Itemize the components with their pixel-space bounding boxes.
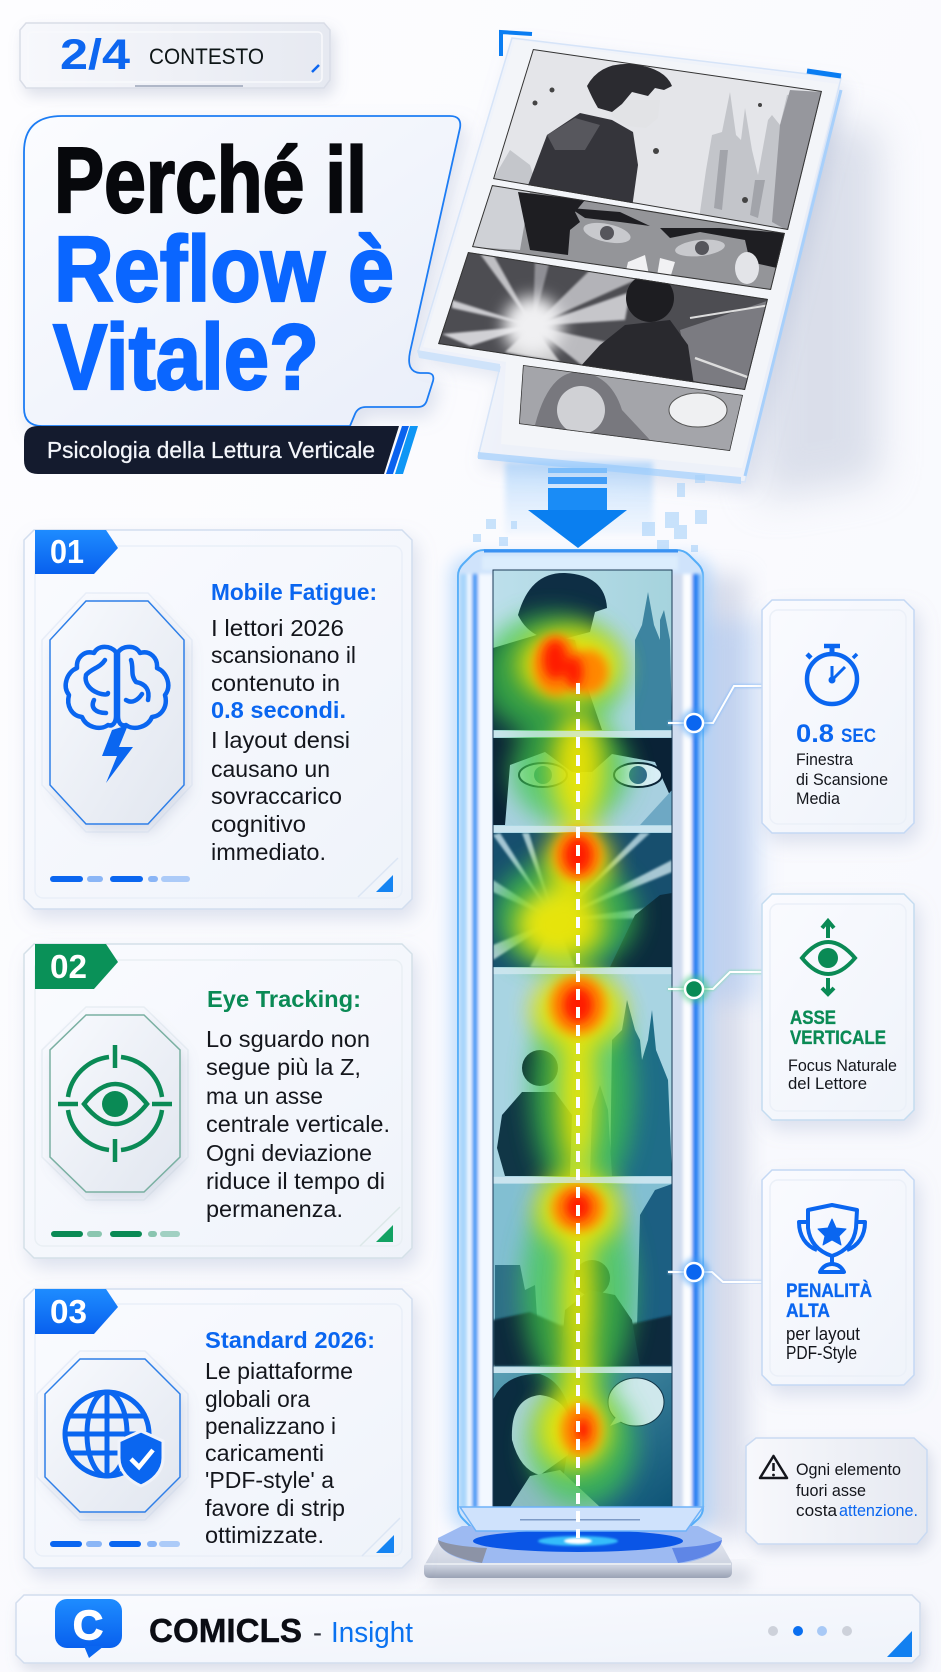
strip panel 1 [493, 570, 672, 730]
heading: standard 2026: Standard 2026: [205, 1327, 375, 1353]
body text card 02 [206, 1026, 390, 1222]
body text card 01: causano un [211, 756, 330, 782]
comic page: original layout [417, 32, 841, 484]
body text card 02: segue più la Z, [206, 1054, 361, 1080]
body text card 03: penalizzano i [205, 1413, 336, 1439]
body text card 01: immediato. [211, 839, 326, 865]
body text card 01: scansionano il [211, 642, 356, 668]
brand suffix: Insight [331, 1617, 413, 1649]
icon: globe with shield [65, 1392, 149, 1476]
stat value: 0.8 [796, 720, 834, 748]
strip panel 3 [493, 833, 672, 967]
stat description [788, 1056, 897, 1093]
strip panel 5 [493, 1184, 672, 1366]
icon: warning triangle [760, 1456, 787, 1478]
panel: title [24, 116, 460, 426]
badge 01 [35, 530, 118, 574]
callout text [796, 1460, 918, 1520]
stat title: PENALITÀ [786, 1280, 872, 1302]
callout: warning note [746, 1438, 927, 1544]
arrow: flow from comic to device [505, 462, 653, 548]
body text card 01: contenuto in [211, 670, 340, 696]
stat description: Media [796, 789, 841, 808]
body text card 03: caricamenti [205, 1440, 324, 1466]
side card: asse verticale [762, 894, 914, 1120]
badge 03 [35, 1289, 118, 1334]
decorative pixels around arrow [473, 475, 707, 552]
stat description: Finestra [796, 750, 853, 769]
body text card 03: globali ora [205, 1386, 310, 1412]
side card: penalità alta [762, 1170, 914, 1385]
tag: 2/4 contesto [20, 23, 330, 88]
comic panel 3: explosion [438, 252, 770, 392]
body text card 03 [205, 1358, 353, 1548]
body text card 03: 'PDF-style' a [205, 1467, 334, 1493]
connector node: green [681, 975, 709, 1003]
panel: card 01 mobile fatigue [24, 530, 412, 909]
stat description [786, 1324, 860, 1363]
body text card 02: ma un asse [206, 1083, 323, 1109]
badge 02 [35, 944, 118, 989]
connector lines to side cards [668, 686, 772, 1282]
body text card 02: permanenza. [206, 1196, 343, 1222]
footer bar [16, 1595, 920, 1663]
icon frame: target eye [42, 1007, 188, 1200]
comic panel 2: eyes close-up [472, 185, 785, 290]
pagination dots [768, 1626, 852, 1636]
body text card 02: riduce il tempo di [206, 1168, 385, 1194]
body text card 01: I lettori 2026 [211, 615, 344, 641]
icon: trophy with star [799, 1205, 865, 1272]
heatmap overlay [480, 613, 637, 1507]
body text card 03: Le piattaforme [205, 1358, 353, 1384]
badge 02: 02 [50, 948, 87, 985]
side card: 0.8 sec [762, 600, 914, 833]
panel: card 03 standard 2026 [24, 1289, 412, 1568]
body text card 01: I layout densi [211, 727, 350, 753]
title line 3: Vitale? [53, 305, 319, 409]
stat description: per layout [786, 1324, 860, 1344]
badge 03: 03 [50, 1293, 87, 1330]
subtitle text: Psicologia della Lettura Verticale [47, 437, 375, 463]
callout text: Ogni elemento [796, 1460, 901, 1479]
logo: chat bubble C [55, 1599, 122, 1658]
body text card 02: centrale verticale. [206, 1111, 390, 1137]
subtitle bar [24, 426, 418, 474]
title line 2: Reflow è [54, 217, 394, 321]
stat description: del Lettore [788, 1074, 867, 1093]
callout text: costa [796, 1501, 838, 1520]
icon frame: globe shield [37, 1351, 188, 1520]
side card: 0.8 sec: SEC [841, 726, 876, 747]
icon: stopwatch [807, 646, 857, 704]
stat description: Focus Naturale [788, 1056, 897, 1075]
stat description: PDF-Style [786, 1343, 857, 1363]
stat description [796, 750, 888, 808]
device base [424, 1507, 732, 1578]
callout text: attenzione. [839, 1501, 918, 1520]
progress bars card 02 [51, 1231, 180, 1237]
body text card 01: cognitivo [211, 811, 306, 837]
side card: penalità alta: ALTA [786, 1301, 830, 1322]
body text card 01 [211, 615, 356, 865]
icon: eye with vertical arrows [802, 921, 855, 994]
body text card 02: Ogni deviazione [206, 1140, 372, 1166]
logo: chat bubble C: C [73, 1602, 103, 1648]
device: vertical strip reader [450, 550, 712, 1532]
heading: mobile fatigue: Mobile Fatigue: [211, 579, 377, 605]
heading: eye tracking: Eye Tracking: [207, 986, 361, 1012]
stat title: ASSE [790, 1008, 836, 1029]
body text card 03: ottimizzate. [205, 1522, 324, 1548]
body text card 03: favore di strip [205, 1495, 345, 1521]
body text card 01: sovraccarico [211, 783, 342, 809]
icon frame: brain [42, 593, 192, 832]
dashed reading axis [576, 683, 580, 1538]
progress bars card 03 [50, 1541, 180, 1547]
title line 1: Perché il [54, 128, 367, 232]
progress bars card 01 [50, 876, 190, 882]
comic brackets [501, 32, 532, 56]
soft shadow behind comic and device [430, 110, 880, 1586]
stat description: di Scansione [796, 770, 888, 789]
comic panel 4: girl and speech bubble [519, 365, 743, 451]
device screen: tinted strip panels [480, 570, 672, 1507]
body text card 01: 0.8 secondi. [211, 697, 346, 723]
icon: brain with lightning [66, 647, 168, 728]
body text card 02: Lo sguardo non [206, 1026, 370, 1052]
comic panel 1: boy and skyline [493, 49, 822, 232]
strip panel 6 [493, 1373, 672, 1507]
callout text: fuori asse [796, 1481, 866, 1500]
tag number: 2/4 [60, 31, 130, 79]
brand name: COMICLS [149, 1612, 302, 1649]
strip panel 2 [493, 738, 672, 825]
connector node: blue top [681, 709, 709, 737]
side card: asse verticale: VERTICALE [790, 1028, 886, 1049]
panel: card 02 eye tracking [24, 944, 412, 1258]
strip panel 4 [497, 1000, 672, 1176]
badge 01: 01 [50, 533, 84, 570]
tag label: CONTESTO [149, 44, 264, 69]
footer bar: - [313, 1617, 322, 1648]
connector node: blue bottom [681, 1258, 709, 1286]
icon: target with eye [58, 1045, 172, 1162]
